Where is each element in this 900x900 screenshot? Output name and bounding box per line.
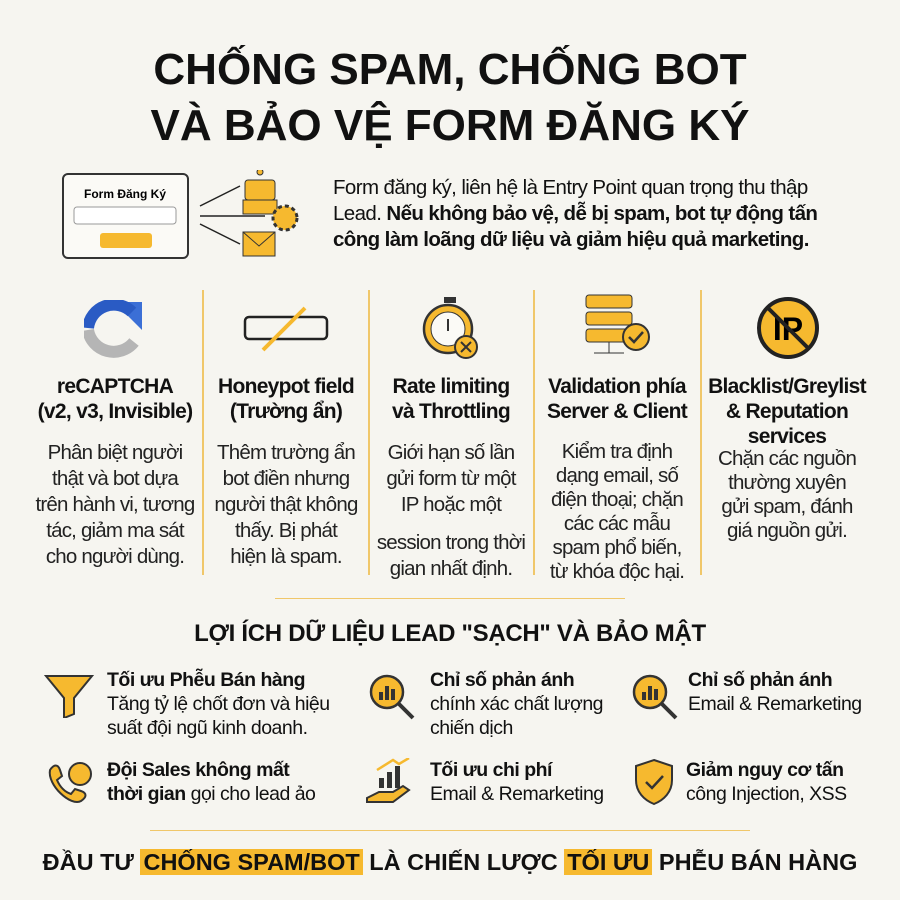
panel: rate limiting: Rate limiting [393,375,509,398]
benefit: funnel: suất đội ngũ kinh doanh. [107,717,308,739]
benefit: email metrics: Email & Remarketing [688,693,862,715]
panel: blacklist: & Reputation [726,400,848,423]
panel: validation: điện thoại; chặn [551,488,683,511]
panel: rate limiting: và Throttling [392,400,510,423]
icon: stopwatch [422,297,478,359]
panel: validation: các các mẫu [564,512,670,535]
panel: rate limiting [377,297,525,580]
benefit: funnel [44,668,330,739]
panel: blacklist: services [748,425,826,448]
panel: validation: Validation phía [548,375,686,398]
title: VÀ BẢO VỆ FORM ĐĂNG KÝ [151,101,749,150]
benefit: email metrics [632,669,862,720]
benefit: security: công Injection, XSS [686,783,847,805]
panel: blacklist: thường xuyên [728,471,846,494]
benefit: metrics: chiến dịch [430,717,513,739]
panel: blacklist: giá nguồn gửi. [727,519,847,542]
panel: validation: từ khóa độc hại. [550,560,684,583]
intro text: công làm loãng dữ liệu và giảm hiệu quả marketing. [333,228,809,251]
panel: rate limiting: Giới hạn số lần [388,441,514,464]
panel: honeypot: thấy. Bị phát [235,519,337,542]
panel: honeypot: (Trường ẩn) [230,400,342,423]
illustration: form under attack: Form Đăng Ký [84,187,166,201]
benefit: cost: Email & Remarketing [430,783,604,805]
panel: reCAPTCHA: (v2, v3, Invisible) [38,400,192,423]
panel: reCAPTCHA: thật và bot dựa [52,467,178,490]
panel: honeypot: hiện là spam. [230,545,342,568]
panel: blacklist: Blacklist/Greylist [708,375,866,398]
benefit: email metrics: Chỉ số phản ánh [688,669,832,691]
panel: honeypot: Honeypot field [218,375,354,398]
benefit: sales time: Đội Sales không mất [107,759,289,781]
panel: validation: dạng email, số [556,464,678,487]
benefit: sales time [48,759,315,805]
panel: honeypot: người thật không [214,493,358,516]
panel: reCAPTCHA: reCAPTCHA [57,375,173,398]
benefits heading: LỢI ÍCH DỮ LIỆU LEAD "SẠCH" VÀ BẢO MẬT [194,620,706,647]
panel: validation: spam phổ biến, [552,536,681,559]
panel: blacklist: Chặn các nguồn [718,447,856,470]
panel: validation [547,294,688,583]
benefit: cost [366,758,604,805]
benefit: metrics: chính xác chất lượng [430,693,603,715]
panel: blacklist [708,297,866,542]
panel: reCAPTCHA: trên hành vi, tương [36,493,194,516]
panel: blacklist: gửi spam, đánh [721,495,853,518]
panel: rate limiting: session trong thời [377,531,525,554]
title [150,45,749,150]
icon: blocked IP [757,297,819,359]
panel: honeypot: Thêm trường ẩn [217,441,355,464]
intro text: Lead. Nếu không bảo vệ, dễ bị spam, bot tự động tấn [333,202,817,225]
footer banner: ĐẦU TƯ CHỐNG SPAM/BOT LÀ CHIẾN LƯỢC TỐI ƯU PHỄU BÁN HÀNG [43,849,857,875]
panel: reCAPTCHA: Phân biệt người [48,441,182,464]
benefit: security: Giảm nguy cơ tấn [686,759,844,781]
intro text: Form đăng ký, liên hệ là Entry Point quan trọng thu thập [333,176,808,199]
icon: blocked IP: IP [773,311,803,347]
title: CHỐNG SPAM, CHỐNG BOT [153,45,747,94]
benefit: metrics: Chỉ số phản ánh [430,669,574,691]
panel: validation: Kiểm tra định [562,440,672,463]
panel: rate limiting: gian nhất định. [390,557,512,580]
icon: hidden field [244,306,328,352]
benefit: cost: Tối ưu chi phí [430,759,552,781]
panel: validation: Server & Client [547,400,687,423]
panel: rate limiting: IP hoặc một [401,493,501,516]
panel: reCAPTCHA: tác, giảm ma sát [46,519,184,542]
benefit: metrics [370,669,603,739]
intro text [333,176,817,251]
benefit: funnel: Tăng tỷ lệ chốt đơn và hiệu [107,693,330,715]
panel: honeypot [214,306,358,568]
panel: honeypot: bot điền nhưng [223,467,349,490]
benefit: funnel: Tối ưu Phễu Bán hàng [107,669,305,691]
panel: rate limiting: gửi form từ một [386,467,516,490]
icon: recaptcha [84,300,142,358]
benefit: sales time: thời gian gọi cho lead ảo [107,783,315,805]
benefit: security [635,759,847,806]
panel: reCAPTCHA [36,300,194,568]
panel: reCAPTCHA: cho người dùng. [46,545,184,568]
illustration: form under attack [62,170,298,259]
icon: server check [586,294,650,354]
